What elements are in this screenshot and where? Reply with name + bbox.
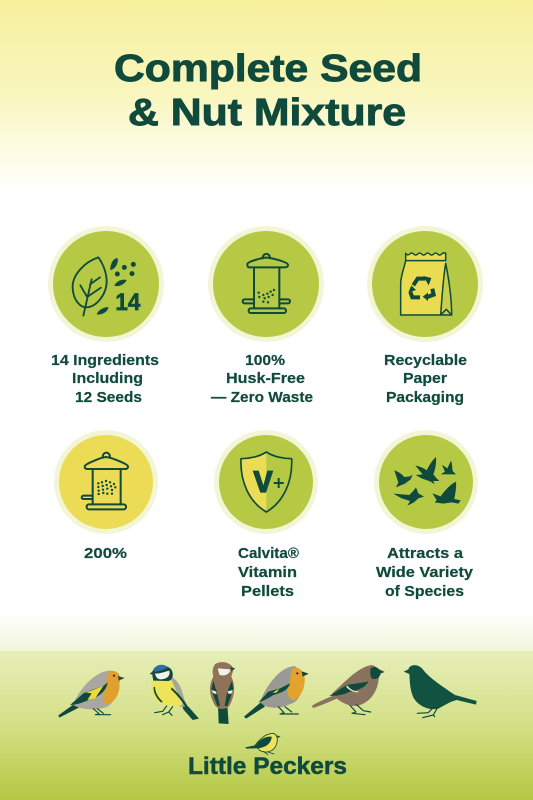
label: of Species — [385, 583, 464, 600]
label: Wide Variety — [376, 564, 474, 581]
label: — Zero Waste — [211, 389, 313, 406]
panel: wide variety of species — [374, 430, 478, 600]
bird 1: robin — [58, 671, 125, 718]
panel: 200% — [54, 430, 158, 562]
label: Packaging — [386, 389, 464, 406]
label: 100% — [245, 352, 285, 369]
title: & Nut Mixture — [128, 92, 406, 134]
icon: vitamin shield badge — [214, 430, 318, 534]
background: top yellow gradient — [0, 0, 533, 195]
label: 12 Seeds — [75, 389, 142, 406]
bird 2: blue tit — [150, 665, 199, 720]
label: Attracts a — [387, 545, 464, 562]
label: Including — [72, 370, 143, 387]
panel: husk-free — [208, 226, 324, 406]
label — [238, 545, 299, 600]
label — [384, 352, 467, 406]
panel: 14 ingredients — [48, 226, 164, 406]
icon: leaf and seeds badge — [48, 226, 164, 342]
birds row — [58, 662, 477, 724]
label: Vitamin — [238, 564, 297, 581]
logo bird — [245, 733, 281, 755]
label: Calvita® — [238, 545, 299, 562]
label: Pellets — [241, 583, 294, 600]
background: bottom green band — [0, 651, 533, 800]
icon: flock of birds badge — [374, 430, 478, 534]
logo — [188, 733, 347, 780]
panel: calvita pellets — [214, 430, 318, 600]
label — [376, 545, 474, 600]
label: Paper — [403, 370, 447, 387]
icon: yellow feeder badge — [54, 430, 158, 534]
title — [114, 48, 422, 134]
label — [211, 352, 313, 406]
bird 5: brown finch — [312, 665, 385, 715]
title: Complete Seed — [114, 48, 422, 90]
label: 14 Ingredients — [51, 352, 159, 369]
label — [51, 352, 159, 406]
label: Recyclable — [384, 352, 467, 369]
icon: seed feeder badge — [208, 226, 324, 342]
bird 6: dark silhouette — [404, 665, 477, 718]
icon: leaf and seeds badge: 14 — [115, 289, 141, 316]
bird 3: sparrow from behind — [210, 662, 235, 724]
logo wordmark: Little Peckers — [188, 753, 347, 780]
bird 4: robin right — [244, 666, 309, 719]
label: Husk-Free — [226, 370, 305, 387]
panel: recyclable packaging — [367, 226, 483, 406]
label: 200% — [84, 545, 127, 562]
icon: paper bag badge — [367, 226, 483, 342]
background: lower fade — [0, 610, 533, 651]
icon: recycling arrows — [408, 276, 434, 301]
